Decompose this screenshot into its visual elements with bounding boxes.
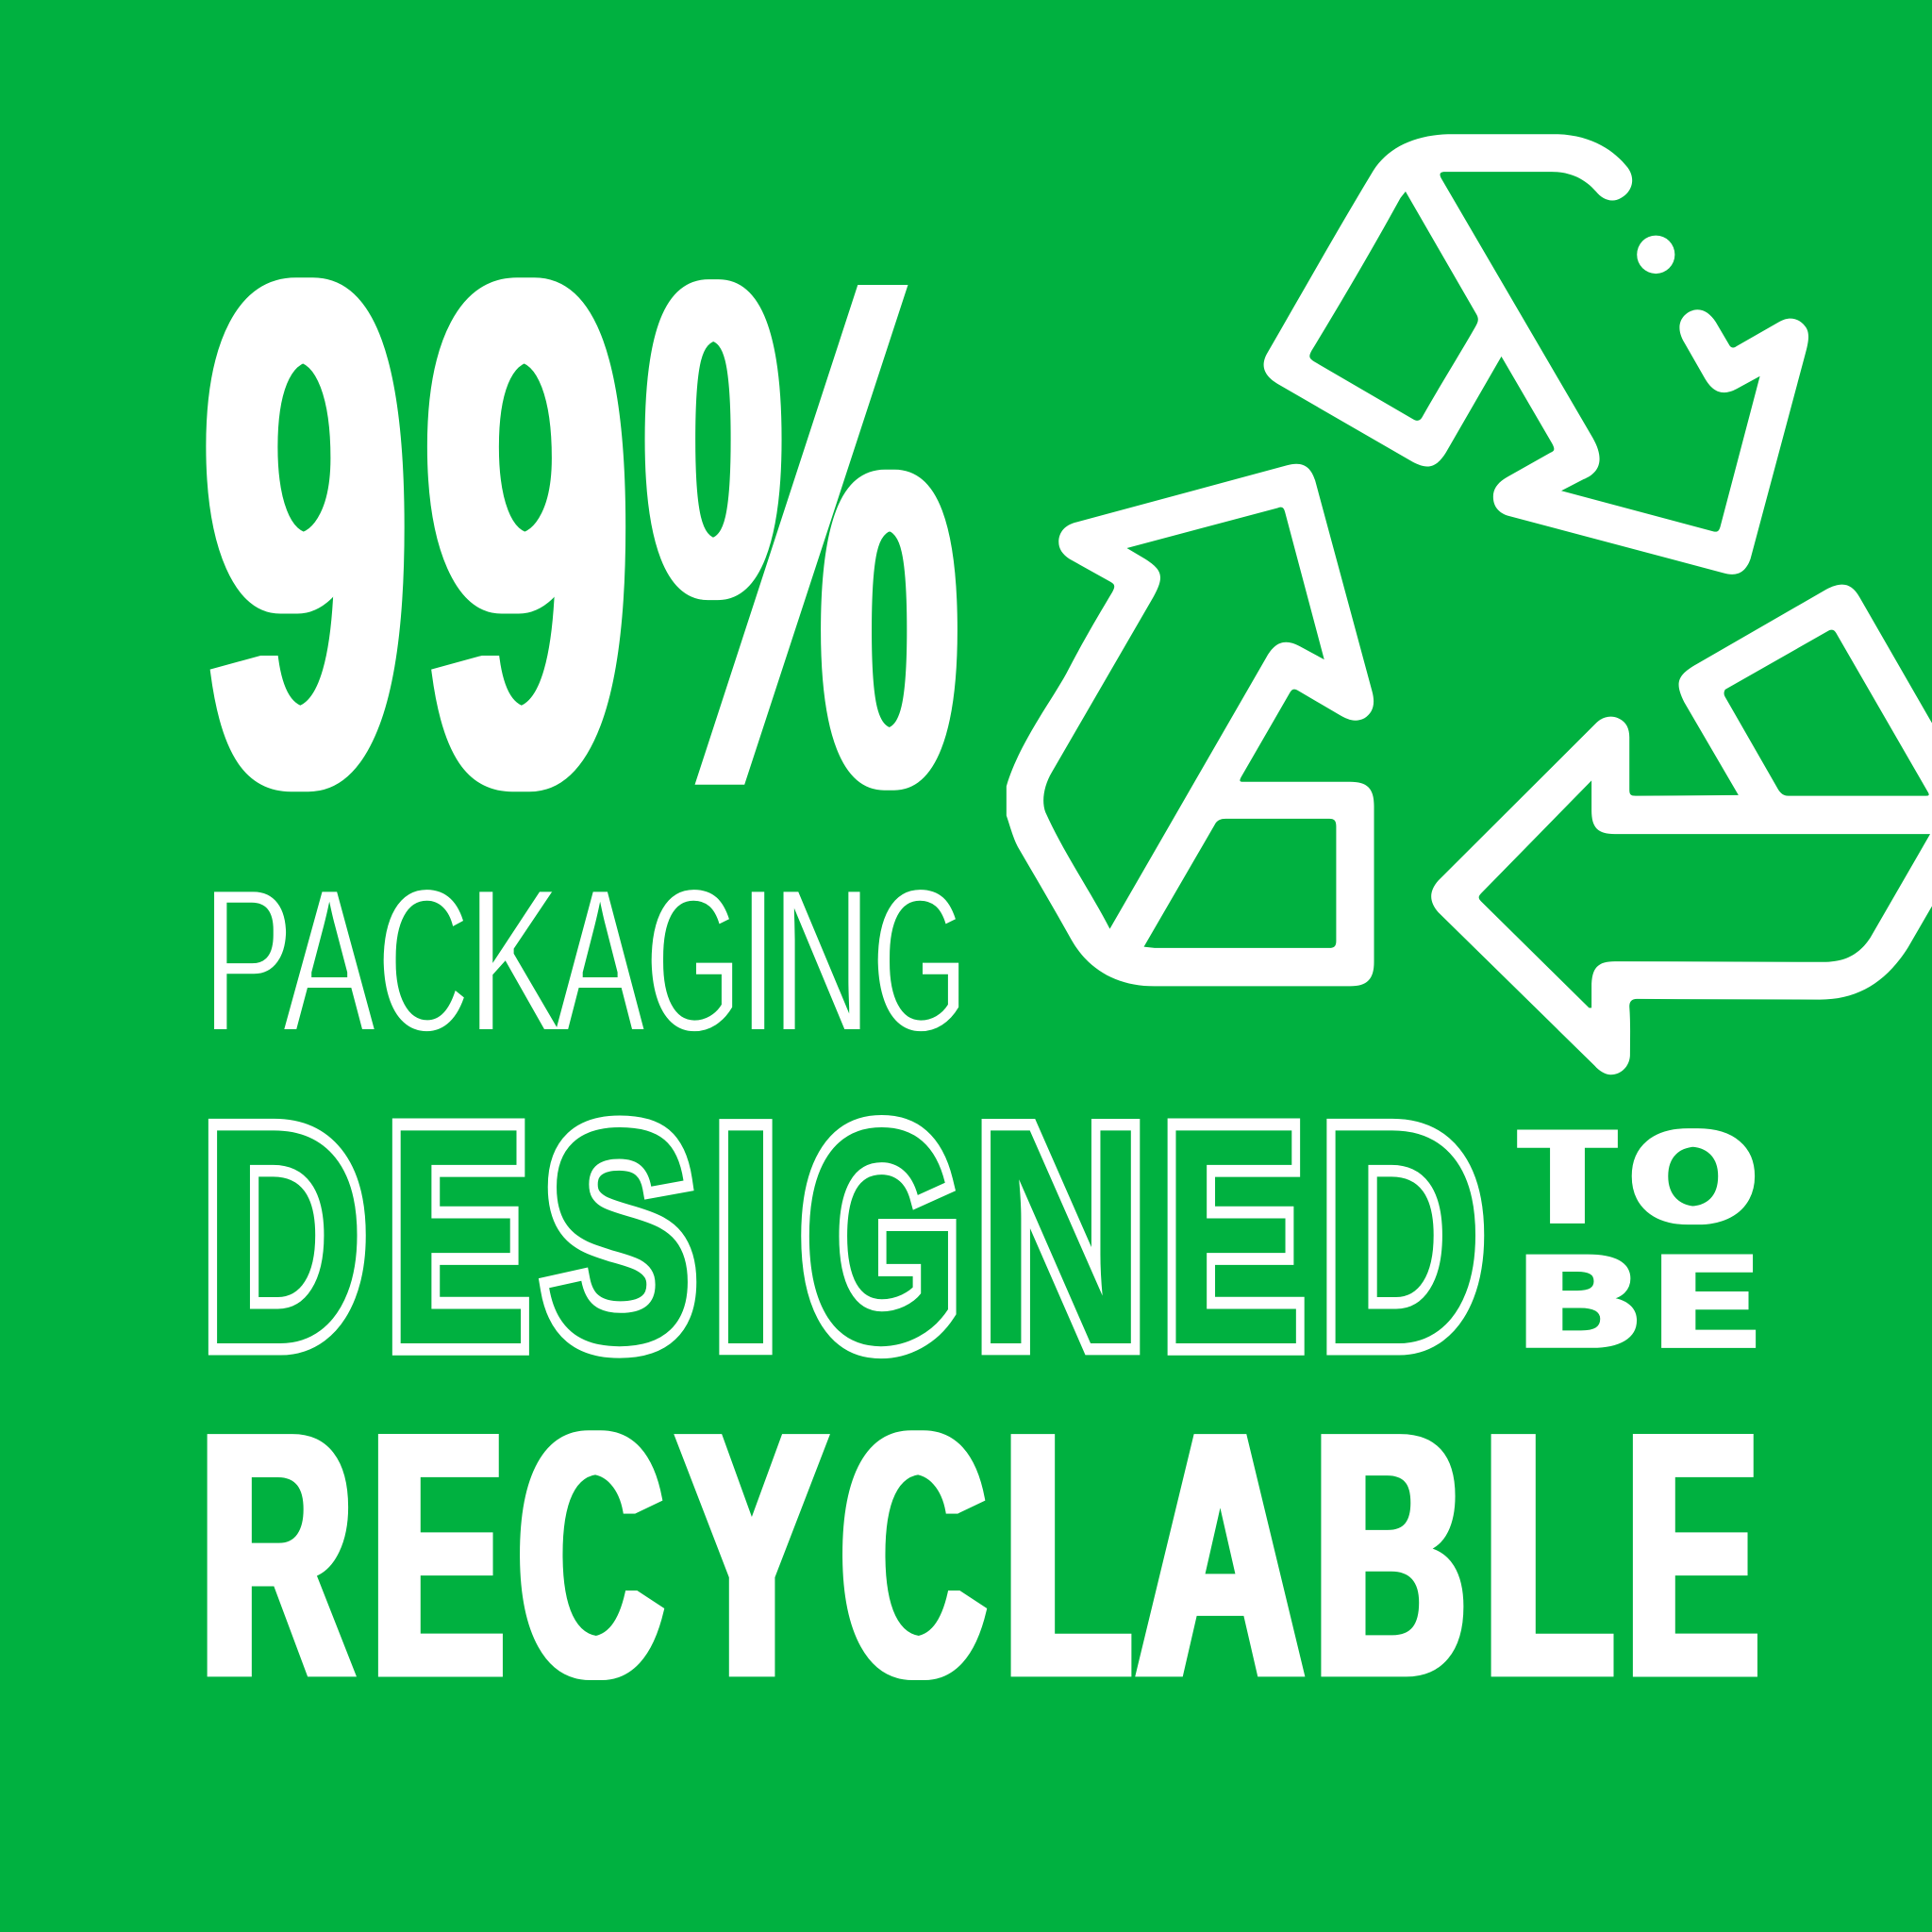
text: DESIGNED outlined: S	[542, 1064, 697, 1409]
heading: 99%: %	[642, 134, 960, 934]
text: PACKAGING: A	[283, 844, 376, 1075]
heading: 99%: 9	[425, 133, 629, 933]
text: PACKAGING: C	[377, 844, 470, 1075]
text: PACKAGING: G	[872, 846, 968, 1076]
text: PACKAGING: I	[739, 845, 777, 1076]
text: DESIGNED outlined: D	[1320, 1064, 1485, 1410]
text: BE: B	[1522, 1227, 1638, 1374]
text: PACKAGING: N	[773, 846, 871, 1076]
text: PACKAGING: P	[203, 846, 293, 1076]
text: PACKAGING	[203, 844, 968, 1076]
icon: top recycling arrow	[1264, 134, 1808, 575]
text: RECYCLABLE: A	[1137, 1362, 1304, 1749]
text: RECYCLABLE	[200, 1361, 1758, 1749]
text: TO: O	[1632, 1103, 1755, 1250]
text: TO	[1523, 1103, 1755, 1250]
icon: right recycling arrow	[1431, 585, 1932, 1074]
text: RECYCLABLE: B	[1314, 1362, 1466, 1749]
text: RECYCLABLE: C	[841, 1362, 985, 1748]
text: PACKAGING: A	[555, 845, 645, 1076]
text: BE	[1522, 1227, 1755, 1374]
text: RECYCLABLE: L	[1004, 1362, 1131, 1749]
text: RECYCLABLE: C	[519, 1362, 662, 1748]
text: TO: T	[1523, 1104, 1612, 1250]
text: RECYCLABLE: E	[372, 1362, 504, 1749]
text: BE: E	[1658, 1227, 1755, 1374]
text: PACKAGING: K	[468, 844, 562, 1075]
text: RECYCLABLE: Y	[678, 1361, 825, 1749]
text: DESIGNED outlined: N	[974, 1064, 1147, 1410]
text: DESIGNED outlined: E	[1161, 1063, 1305, 1409]
text: DESIGNED outlined: I	[712, 1064, 779, 1409]
text: DESIGNED outlined: E	[386, 1063, 529, 1409]
text: DESIGNED outlined	[202, 1063, 1485, 1410]
text: RECYCLABLE: L	[1484, 1362, 1613, 1748]
text: DESIGNED outlined: G	[801, 1064, 960, 1410]
heading: 99%: 9	[204, 133, 408, 933]
text: RECYCLABLE: E	[1626, 1362, 1758, 1749]
text: PACKAGING: G	[645, 846, 741, 1076]
icon: dot	[1637, 236, 1674, 274]
text: RECYCLABLE: R	[200, 1362, 353, 1748]
text: DESIGNED outlined: D	[202, 1064, 367, 1410]
icon: recycling symbol	[1007, 134, 1932, 1074]
icon: left recycling arrow	[1007, 464, 1374, 986]
heading: 99%	[204, 133, 960, 934]
